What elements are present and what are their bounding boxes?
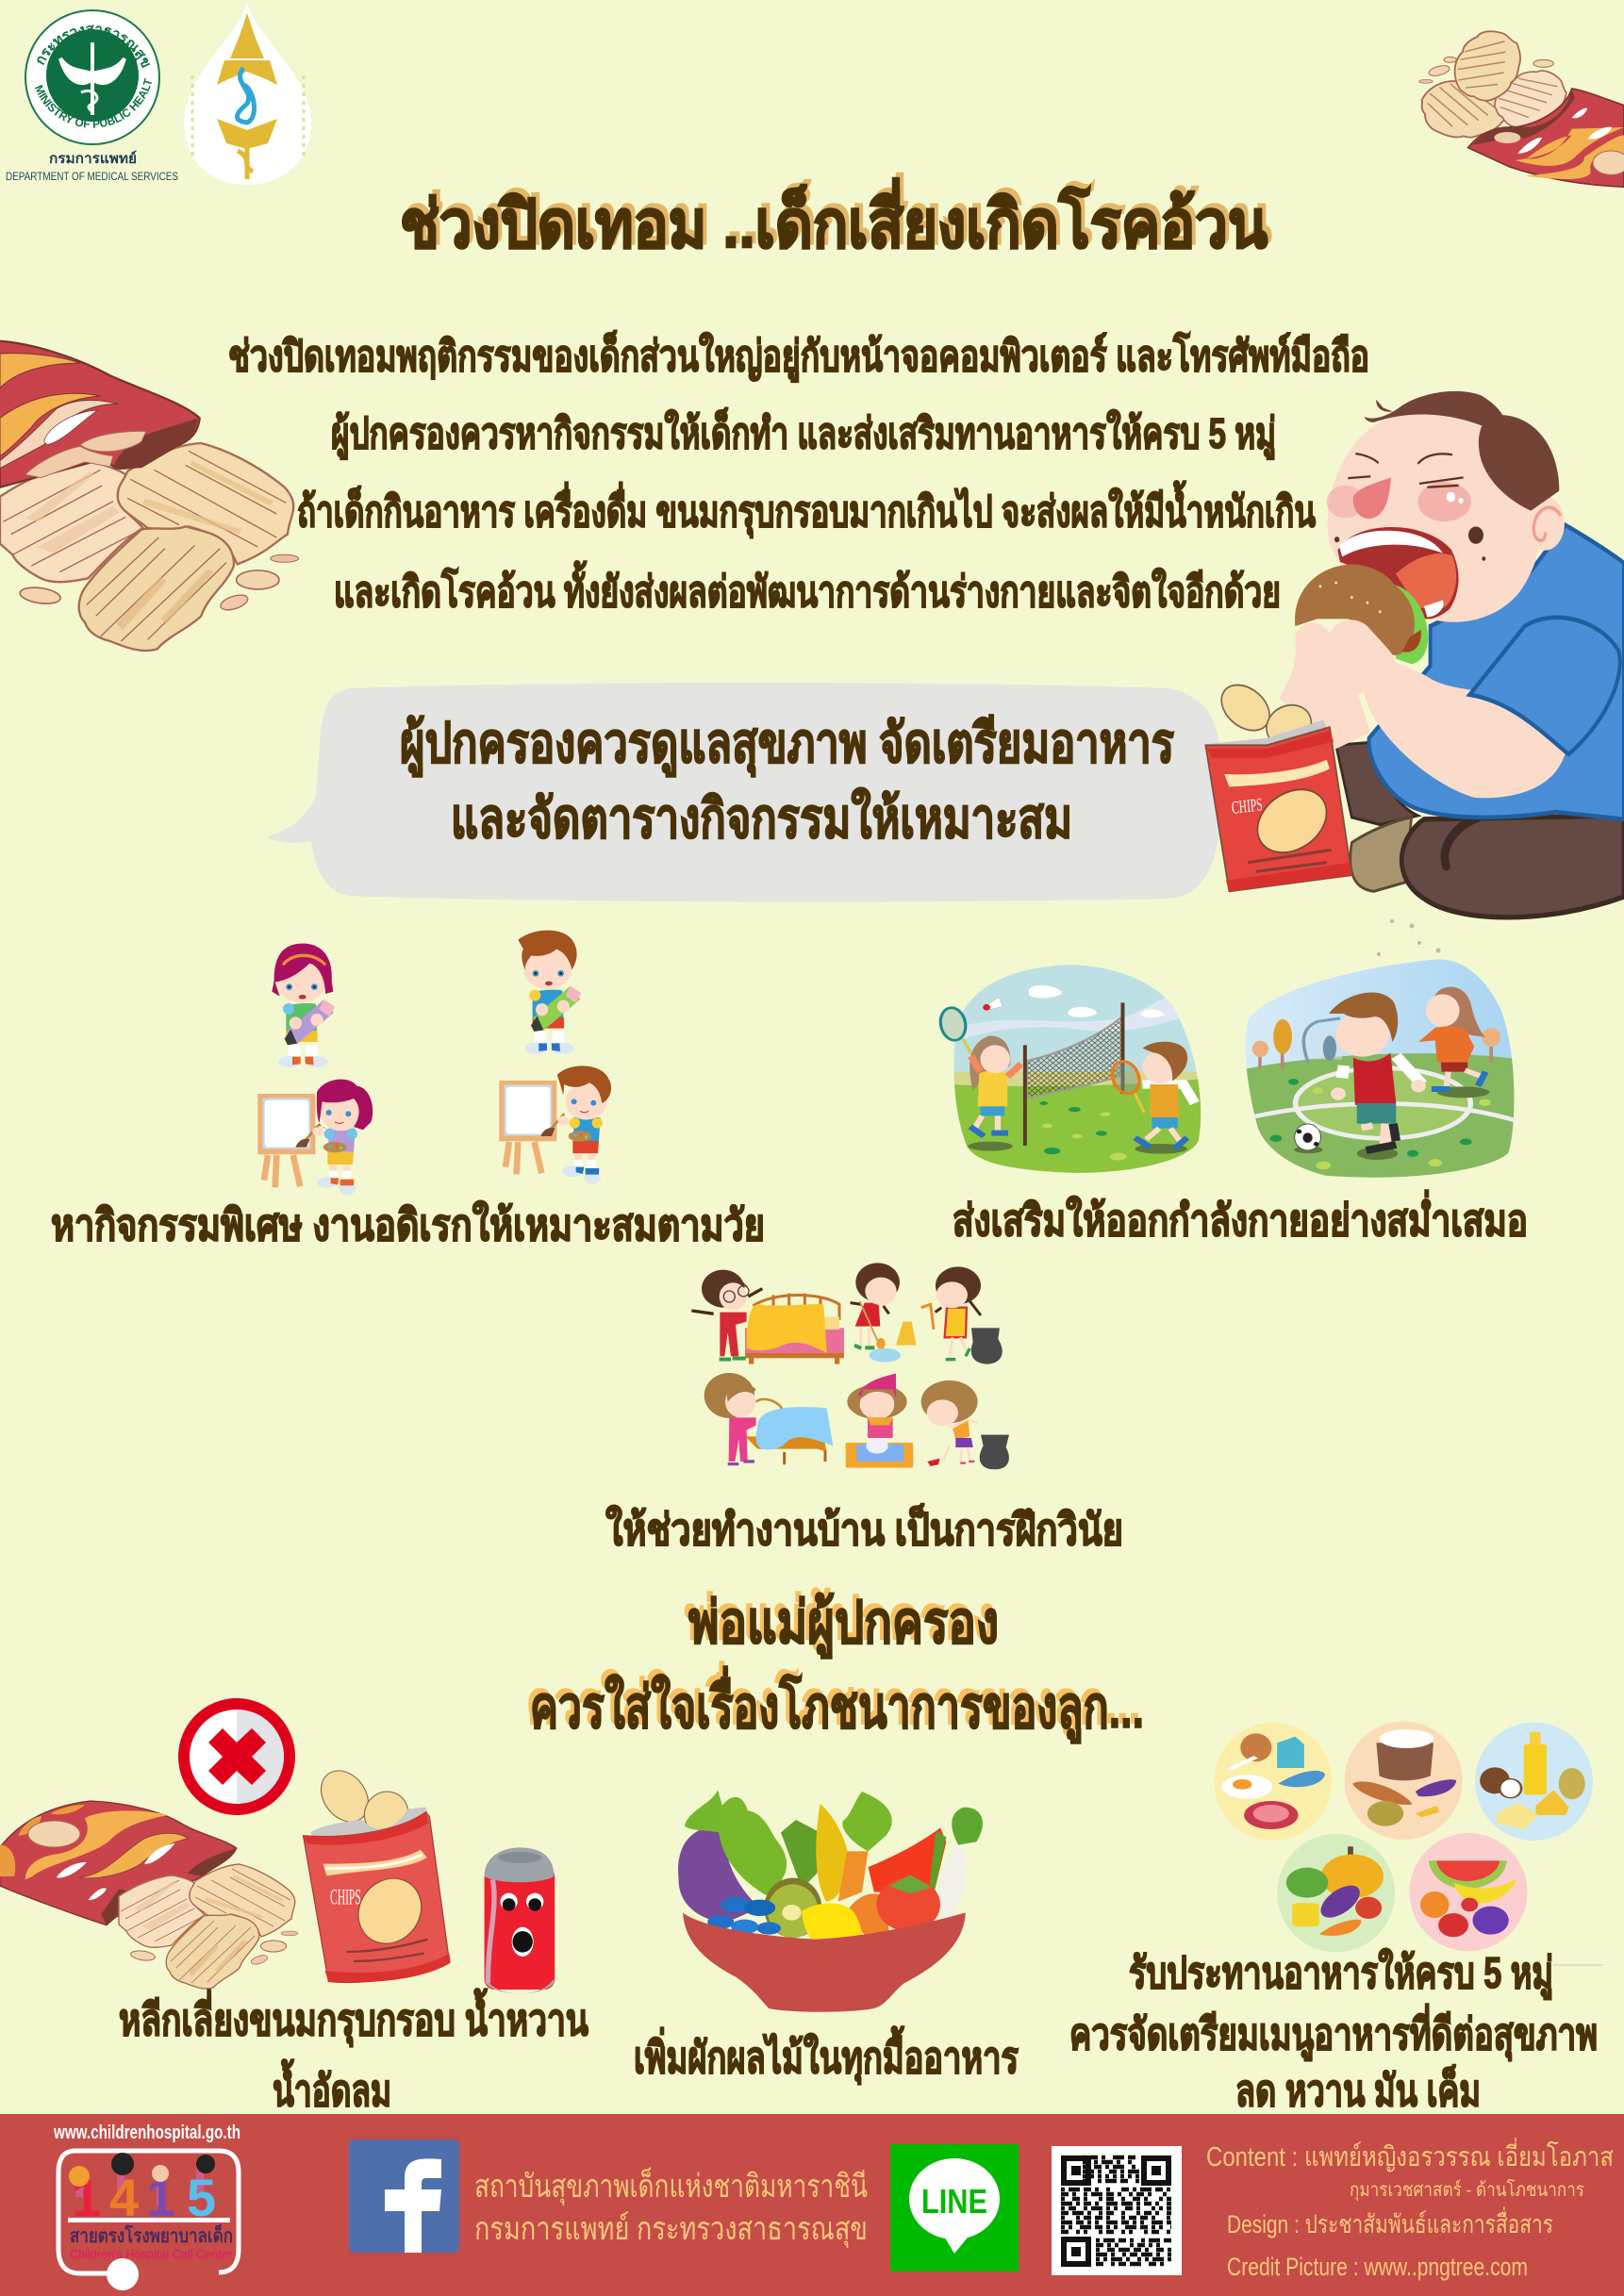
- QR code: [1052, 2146, 1182, 2275]
- boy painting: [499, 1065, 611, 1184]
- bag: [0, 341, 200, 487]
- callout speech bubble: [267, 683, 1223, 901]
- intro paragraph: ผู้ปกครองควรหากิจกรรมให้เด็กทำ และส่งเสริมทานอาหารให้ครบ 5 หมู่: [331, 407, 1276, 460]
- footer: institution text: สถาบันสุขภาพเด็กแห่งชาติมหาราชินี: [474, 2167, 868, 2205]
- caption: avoid snacks: น้ำอัดลม: [273, 2058, 391, 2115]
- logo: Queen Sirikit National Institute of Child Health: [184, 2, 311, 185]
- boy sleeve: [1469, 618, 1620, 754]
- chips packet: CHIPS: [330, 1886, 361, 1909]
- football girl: [1418, 987, 1485, 1089]
- bowl: [683, 1912, 966, 2012]
- icon: LINE: LINE: [921, 2182, 987, 2221]
- snacks: [0, 1764, 555, 1994]
- logo: 1415 call centre: Children's Hospital Call Center: [70, 2247, 233, 2261]
- food illustrations: [678, 1722, 1593, 2012]
- boy holding pencil: [518, 931, 581, 1054]
- footer: credits: กุมารเวชศาสตร์ - ด้านโภชนาการ: [1350, 2179, 1584, 2202]
- logo: 1415 call centre: สายตรงโรงพยาบาลเด็ก: [70, 2223, 233, 2247]
- logo: Ministry of Public Health: กรมการแพทย์: [49, 150, 137, 167]
- icon: Facebook: [349, 2139, 459, 2253]
- chips bag: [0, 1801, 237, 1925]
- chips bag: CHIPS: [1231, 794, 1264, 818]
- logo: Ministry of Public Health: DEPARTMENT OF MEDICAL SERVICES: [6, 170, 178, 183]
- heading: parents: พ่อแม่ผู้ปกครอง: [688, 1591, 999, 1659]
- chips packet: [303, 1764, 451, 1983]
- food group: vegetables: [1277, 1834, 1395, 1952]
- intro paragraph: และเกิดโรคอ้วน ทั้งยังส่งผลต่อพัฒนาการด้านร่างกายและจิตใจอีกด้วย: [334, 560, 1281, 616]
- badminton scene: [938, 962, 1210, 1176]
- boy hands: [1280, 619, 1396, 749]
- icon: prohibition mark: [178, 1698, 295, 1815]
- football boy: [1329, 993, 1426, 1150]
- football scene: [1239, 955, 1519, 1181]
- chip pile bottom left: [119, 1864, 298, 1989]
- callout speech bubble: ผู้ปกครองควรดูแลสุขภาพ จัดเตรียมอาหาร: [400, 713, 1174, 778]
- caption: five food groups: ลด หวาน มัน เค็ม: [1235, 2064, 1481, 2115]
- logo: 1415 call centre: 4: [109, 2168, 139, 2227]
- footer: website: www.childrenhospital.go.th: [53, 2123, 240, 2143]
- logo: 1415 call centre: [58, 2151, 239, 2290]
- chips bag: [1205, 676, 1351, 891]
- logo: Ministry of Public Health: กระทรวงสาธารณสุข: [37, 25, 151, 68]
- badminton girl: [969, 1035, 1021, 1136]
- footer: institution text: [474, 2167, 868, 2248]
- logo: 1415 call centre: 5: [187, 2168, 216, 2227]
- girl painting: [257, 1080, 373, 1196]
- food group: carbohydrates: [1345, 1722, 1463, 1840]
- heading: parents: [530, 1591, 1144, 1743]
- illustration: children doing chores: [691, 1263, 1009, 1469]
- bed with yellow blanket: [745, 1294, 844, 1364]
- heading: parents: ควรใส่ใจเรื่องโภชนาการของลูก...: [530, 1666, 1144, 1743]
- girl with trash bag: [921, 1266, 1003, 1364]
- footer: credits: [1206, 2138, 1614, 2281]
- chip pile: [0, 443, 299, 651]
- girl mopping: [851, 1263, 917, 1363]
- chips bag top right: [1419, 19, 1624, 187]
- bag: [1468, 89, 1624, 187]
- girl spreading blanket: [704, 1373, 756, 1464]
- title: ช่วงปิดเทอม ..เด็กเสี่ยงเกิดโรคอ้วน: [400, 177, 1268, 261]
- caption: avoid snacks: [119, 1988, 588, 2115]
- crumbs: [1377, 919, 1441, 956]
- chips: [1419, 19, 1573, 141]
- footer: institution text: กรมการแพทย์ กระทรวงสาธารณสุข: [474, 2211, 868, 2248]
- food group: fruits: [1409, 1833, 1528, 1951]
- badminton boy: [1108, 1042, 1195, 1148]
- logo: Ministry of Public Health: [6, 9, 178, 183]
- logo: 1415 call centre: 1: [72, 2168, 101, 2227]
- boy arm: [1336, 630, 1566, 798]
- boy head: [1327, 391, 1565, 622]
- footer: credits: Credit Picture : www..pngtree.com: [1227, 2253, 1528, 2281]
- caption: avoid snacks: หลีกเลี่ยงขนมกรุบกรอบ น้ำหวาน: [119, 1988, 588, 2047]
- boy shirt: [1369, 525, 1624, 819]
- boy legs: [1336, 742, 1624, 917]
- food group: fats: [1475, 1723, 1593, 1841]
- chips bag left: [0, 341, 299, 651]
- bowl of vegetables and fruit: [678, 1790, 983, 2012]
- football ball: [1295, 1124, 1320, 1150]
- logo: 1415 call centre: 1: [146, 2168, 175, 2227]
- intro paragraph: [228, 330, 1369, 616]
- illustration: boy eating burger: [1205, 391, 1624, 917]
- girl washing dishes: [846, 1374, 913, 1468]
- girl with trash bag: [921, 1380, 1009, 1469]
- caption: hobbies: หากิจกรรมพิเศษ งานอดิเรกให้เหมาะสมตามวัย: [51, 1199, 765, 1249]
- scene: sports: [938, 955, 1519, 1181]
- bed with blue blanket: [745, 1399, 833, 1464]
- food group: protein: [1214, 1723, 1332, 1841]
- icon: LINE: [890, 2144, 1019, 2271]
- footer band: [0, 2114, 1624, 2296]
- caption: five food groups: [1069, 1947, 1598, 2115]
- caption: household chores: ให้ช่วยทำงานบ้าน เป็นการฝึกวินัย: [605, 1503, 1123, 1554]
- boy burger: [1295, 565, 1428, 664]
- callout speech bubble: และจัดตารางกิจกรรมให้เหมาะสม: [451, 786, 1072, 850]
- caption: add vegetables: เพิ่มผักผลไม้ในทุกมื้ออาหาร: [634, 2025, 1019, 2085]
- girl holding pencil: [272, 944, 335, 1067]
- soda can: [485, 1847, 555, 1994]
- activity children: [257, 931, 611, 1196]
- girl making bed: [691, 1270, 762, 1360]
